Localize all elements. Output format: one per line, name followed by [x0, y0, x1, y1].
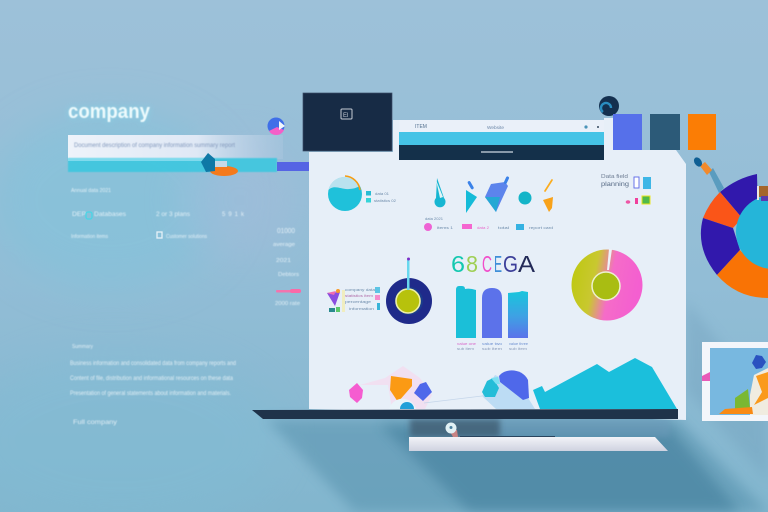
legend row: data 2021	[425, 217, 443, 221]
left text labels: average	[273, 242, 295, 248]
icon: pin and orange tip	[201, 153, 238, 176]
gauge circle: statistics 02	[374, 199, 396, 203]
bar chart	[456, 286, 528, 351]
colourful legend beside donut: information	[349, 307, 374, 311]
headline figure: A	[518, 251, 536, 277]
main panel	[309, 118, 686, 420]
colourful legend beside donut: percentage	[345, 300, 371, 304]
left text labels: 5 9 1 k	[222, 212, 245, 218]
colourful legend beside donut: company data	[345, 288, 375, 292]
top right key	[601, 174, 651, 204]
browser header: ITEM	[415, 124, 427, 130]
bar chart: value two	[482, 342, 502, 346]
small shapes row	[434, 176, 553, 213]
headline figure: G	[503, 251, 518, 277]
headline figure: 8	[466, 251, 478, 277]
colour swatches	[613, 114, 716, 150]
left text labels: 01000	[277, 228, 295, 235]
bar chart: sub item	[509, 347, 527, 351]
pink legend line	[276, 289, 301, 293]
legend row: report card	[529, 225, 553, 230]
paragraph text: Presentation of general statements about information and materials.	[70, 390, 231, 397]
left text labels: Debtors	[278, 272, 300, 278]
colourful legend beside donut	[327, 287, 380, 312]
left text labels: Information items	[71, 234, 108, 240]
bar chart: value three	[509, 342, 528, 346]
browser header: Website	[487, 125, 505, 130]
browser header	[399, 120, 604, 160]
headline figure: 6	[451, 251, 465, 277]
bottom illustration: left cluster	[349, 366, 432, 409]
left text labels: DEP	[72, 212, 86, 218]
icon: small document	[157, 232, 162, 238]
gauge circle: data 01	[375, 192, 389, 196]
picture card	[702, 342, 768, 421]
icon: swirl	[599, 96, 619, 116]
top right key: planning	[601, 181, 629, 188]
teal progress bar	[68, 158, 309, 172]
legend row	[424, 217, 553, 231]
top right key: Data field	[601, 174, 628, 180]
bottom illustration: connector	[424, 396, 482, 403]
top shelf	[252, 409, 678, 419]
left text labels	[71, 188, 300, 307]
legend row: items 1	[437, 225, 454, 230]
bar chart: sub item	[482, 347, 502, 351]
heading: company: company	[68, 101, 151, 123]
icon: colour ball	[268, 118, 285, 135]
paragraph text: Full company	[73, 420, 117, 426]
brush	[692, 156, 724, 193]
bottom illustration: right cluster	[482, 370, 535, 409]
paragraph text: Content of file, distribution and informational resources on these data	[70, 375, 233, 382]
legend row: total	[498, 225, 509, 230]
paragraph text: Business information and consolidated data from company reports and	[70, 360, 236, 367]
paragraph text	[70, 344, 236, 426]
legend row: data 2	[477, 225, 490, 230]
dark tile	[303, 93, 392, 151]
search bar: Document description of company information summary report	[74, 142, 235, 149]
dark tile: El	[343, 113, 348, 119]
headline figure: C	[482, 251, 492, 277]
heading: company: company	[68, 101, 151, 123]
icon: location pin	[446, 422, 458, 437]
shelf shadows	[266, 300, 768, 512]
left text labels: 2021	[276, 258, 291, 264]
paragraph text: Summary	[72, 344, 93, 350]
navy donut	[386, 258, 432, 324]
left text labels: Databases	[94, 212, 126, 218]
search bar	[68, 135, 283, 159]
headline figure: E	[494, 251, 502, 277]
bar chart: sub item	[457, 347, 474, 351]
left text labels: Annual data 2021	[71, 188, 111, 194]
gauge circle	[328, 176, 396, 211]
icon: ring	[86, 212, 92, 219]
pie chart	[572, 249, 642, 320]
donut wheel	[701, 174, 768, 298]
left text labels: 2000 rate	[275, 301, 300, 307]
lower shelf	[409, 436, 668, 451]
bar chart: value one	[457, 342, 476, 346]
left text labels: Customer solutions	[166, 234, 207, 240]
teal mountain	[533, 358, 677, 409]
brown tab	[757, 186, 768, 201]
headline figure	[451, 251, 536, 277]
colourful legend beside donut: statistics item	[345, 294, 373, 298]
left text labels: 2 or 3 plans	[156, 212, 190, 218]
